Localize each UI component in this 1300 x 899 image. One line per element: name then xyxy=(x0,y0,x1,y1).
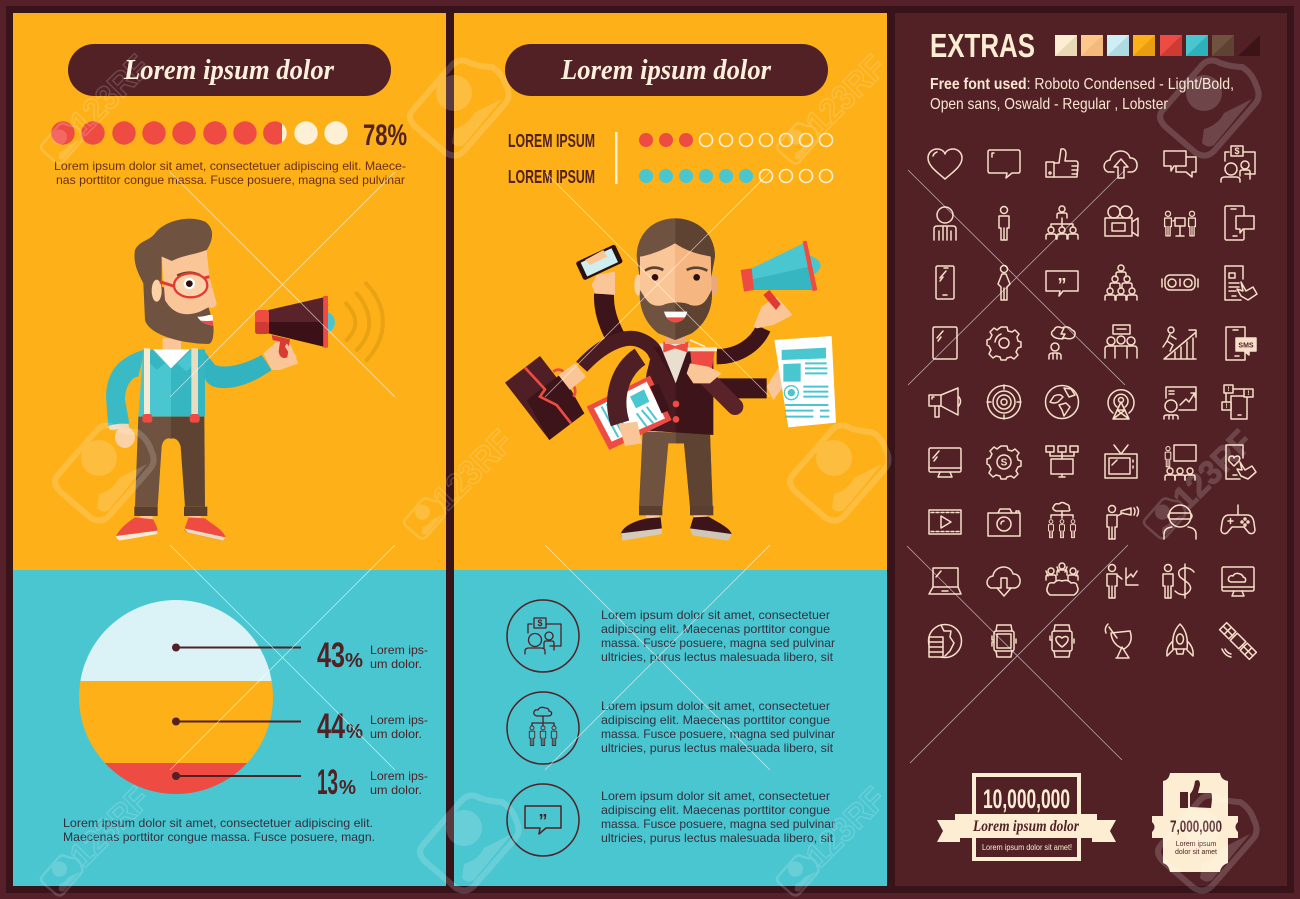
icon: gear xyxy=(987,327,1021,360)
icon: VR user xyxy=(1164,505,1196,539)
pie labels: 13 xyxy=(317,763,338,802)
heading pill xyxy=(505,44,828,96)
icon: cloud download xyxy=(987,567,1020,596)
list text blocks xyxy=(601,608,835,845)
icon: woman xyxy=(998,266,1010,300)
badge: 7,000,000 ticket: Lorem ipsum xyxy=(1176,841,1216,848)
pie labels: % xyxy=(346,721,363,743)
watermark: row 3 xyxy=(41,780,1257,895)
badge: 7,000,000 ticket: dolor sit amet xyxy=(1175,849,1217,856)
dot scales xyxy=(508,131,832,187)
pie labels: um dolor. xyxy=(370,727,422,741)
icon: heart watch xyxy=(1050,625,1074,657)
watermark: row 3: 123RF xyxy=(799,780,894,875)
icon: phone SMS: SMS xyxy=(1238,342,1254,350)
panel: left xyxy=(13,13,446,886)
icon: man with megaphone xyxy=(1107,506,1138,539)
font note: Open sans, Oswald - Regular , Lobster xyxy=(930,96,1169,113)
icon: gear dollar xyxy=(987,446,1021,479)
dot rating 78% xyxy=(51,119,407,152)
pie labels: % xyxy=(345,650,363,672)
list text blocks: massa. Fusce posuere, magna sed pulvinar xyxy=(601,727,835,741)
list text blocks: massa. Fusce posuere, magna sed pulvinar xyxy=(601,636,835,650)
badge: 10,000,000 ribbon: 10,000,000 xyxy=(983,784,1070,814)
icon: phone chat network: ! xyxy=(1248,391,1250,397)
icon grid xyxy=(928,146,1257,659)
pie labels: um dolor. xyxy=(370,783,422,797)
heading pill: Lorem ipsum dolor xyxy=(560,54,772,86)
icon: television xyxy=(1105,445,1137,478)
icon: monitor xyxy=(929,448,961,477)
icon: bust person xyxy=(934,207,956,240)
pie chart xyxy=(79,600,301,794)
panel: extras xyxy=(895,13,1287,886)
icon: brain people xyxy=(1049,327,1075,359)
icon: phone touch xyxy=(1225,266,1257,300)
badge: 10,000,000 ribbon: Lorem ipsum dolor sit amet! xyxy=(982,843,1072,852)
list text blocks: ultricies, purus lectus malesuada libero, sit xyxy=(601,650,834,664)
icon: tablet xyxy=(933,327,957,359)
icon: video player xyxy=(929,510,961,534)
watermark: row 2: 123RF xyxy=(426,423,521,518)
icon: finance team xyxy=(1221,146,1255,182)
icon: thumbs up xyxy=(1046,149,1078,177)
icon: video camera xyxy=(1105,206,1138,236)
badge: 10,000,000 ribbon: Lorem ipsum dolor xyxy=(972,818,1080,835)
icon: phone with bubble xyxy=(1225,206,1254,240)
icon: megaphone xyxy=(929,388,960,417)
pie caption: Maecenas porttitor congue massa. Fusce posuere, magn. xyxy=(63,830,375,844)
icon: two bubbles xyxy=(1164,151,1196,177)
heading pill: Lorem ipsum dolor xyxy=(123,54,335,86)
icon: monitor cloud xyxy=(1222,567,1254,596)
icon: man with chart xyxy=(1107,564,1138,598)
icon: quote bubble: ” xyxy=(1058,275,1066,295)
heading: extras: EXTRAS xyxy=(930,27,1035,64)
icon: phone chat network: ! xyxy=(1228,387,1230,393)
icon: laptop xyxy=(929,568,961,594)
icon: broadcast tower xyxy=(1108,390,1134,419)
list icon: quote bubble xyxy=(507,784,579,856)
icon: people on cloud xyxy=(1046,563,1078,595)
badge: 7,000,000 ticket xyxy=(1152,773,1238,872)
icon: speech bubble xyxy=(988,150,1020,178)
list icon: cloud team xyxy=(507,692,579,764)
watermark: row 2: 123RF xyxy=(1166,423,1261,518)
icon: cloud upload xyxy=(1104,151,1137,178)
list text blocks: ultricies, purus lectus malesuada libero, sit xyxy=(601,741,834,755)
pie labels: Lorem ips- xyxy=(370,643,428,657)
pie labels: % xyxy=(339,777,356,799)
dot scales: LOREM IPSUM xyxy=(508,167,595,187)
icon: growth runner xyxy=(1163,327,1196,359)
icon: phone chat network: ! xyxy=(1226,404,1228,410)
pie caption xyxy=(63,816,375,844)
pie labels: 44 xyxy=(317,707,345,746)
font note xyxy=(930,76,1234,113)
icon: phone xyxy=(936,266,954,299)
text block xyxy=(54,159,406,187)
icon: target xyxy=(987,385,1021,419)
icon: satellite xyxy=(1220,623,1256,659)
icon: group bubble xyxy=(1105,325,1137,358)
icon: standing person xyxy=(999,206,1009,240)
watermark: row 2 xyxy=(55,423,1261,538)
illustration: man with megaphone xyxy=(106,219,383,541)
pie labels: um dolor. xyxy=(370,657,422,671)
icon: heart xyxy=(928,149,962,179)
dot rating 78%: 78% xyxy=(363,119,407,152)
list text blocks: ultricies, purus lectus malesuada libero, sit xyxy=(601,831,834,845)
list text blocks: massa. Fusce posuere, magna sed pulvinar xyxy=(601,817,835,831)
icon: game controller xyxy=(1221,505,1255,534)
icon: satellite dish xyxy=(1105,624,1131,658)
text block: Lorem ipsum dolor sit amet, consectetuer adipiscing elit. Maece- xyxy=(54,159,406,173)
pie caption: Lorem ipsum dolor sit amet, consectetuer adipiscing elit. xyxy=(63,816,373,830)
watermark: row 1: 123RF xyxy=(799,48,894,143)
watermark: row 1: 123RF xyxy=(63,48,158,143)
icon: finance team: $ xyxy=(1234,146,1240,156)
icon: teacher classroom xyxy=(1165,445,1196,480)
list text blocks: adipiscing elit. Maecenas porttitor congue xyxy=(601,803,830,817)
list icon: finance team xyxy=(507,600,579,672)
icon: phone heart xyxy=(1226,445,1256,479)
list text blocks: Lorem ipsum dolor sit amet, consectetuer xyxy=(601,789,830,803)
icon: man with dollar xyxy=(1163,564,1194,598)
icon: presenters xyxy=(1165,211,1195,236)
list icon: quote bubble: ” xyxy=(538,811,548,831)
heading pill xyxy=(68,44,391,96)
font note: Free font used: Roboto Condensed - Light/Bold, xyxy=(930,76,1234,93)
badge: 10,000,000 ribbon xyxy=(937,775,1116,859)
icon: quote bubble xyxy=(1046,271,1078,296)
icon: gear dollar: S xyxy=(1001,458,1008,468)
icon: rocket xyxy=(1167,624,1193,656)
list text blocks: adipiscing elit. Maecenas porttitor congue xyxy=(601,622,830,636)
pie labels xyxy=(317,636,428,802)
list text blocks: adipiscing elit. Maecenas porttitor congue xyxy=(601,713,830,727)
dot scales: LOREM IPSUM xyxy=(508,131,595,151)
icon: smartwatch xyxy=(992,625,1016,657)
colour swatches xyxy=(1055,35,1260,56)
list text blocks: Lorem ipsum dolor sit amet, consectetuer xyxy=(601,699,830,713)
icon: presenter chart xyxy=(1164,387,1196,419)
list icon: finance team: $ xyxy=(537,618,543,628)
icon: globe server xyxy=(928,624,962,658)
icon: network monitor xyxy=(1046,446,1078,477)
icon: phone SMS xyxy=(1226,327,1256,360)
list text blocks: Lorem ipsum dolor sit amet, consectetuer xyxy=(601,608,830,622)
icon: phone chat network xyxy=(1222,385,1253,419)
badge: 7,000,000 ticket: 7,000,000 xyxy=(1170,817,1222,836)
text block: nas porttitor congue massa. Fusce posuere, magna sed pulvinar xyxy=(56,173,405,187)
icon: globe xyxy=(1046,386,1078,418)
watermark: row 1 xyxy=(41,48,1259,163)
illustration: multitasking man xyxy=(505,218,836,541)
icon: people pyramid xyxy=(1105,265,1137,300)
icon: org chart xyxy=(1046,206,1078,239)
icon: camera xyxy=(988,509,1020,536)
pie labels: Lorem ips- xyxy=(370,713,428,727)
pie labels: 43 xyxy=(317,636,345,675)
icon: VR headset xyxy=(1162,275,1198,290)
panel: middle xyxy=(454,13,887,886)
pie labels: Lorem ips- xyxy=(370,769,428,783)
watermark: row 3: 123RF xyxy=(63,780,158,875)
icon: cloud team xyxy=(1049,502,1075,538)
